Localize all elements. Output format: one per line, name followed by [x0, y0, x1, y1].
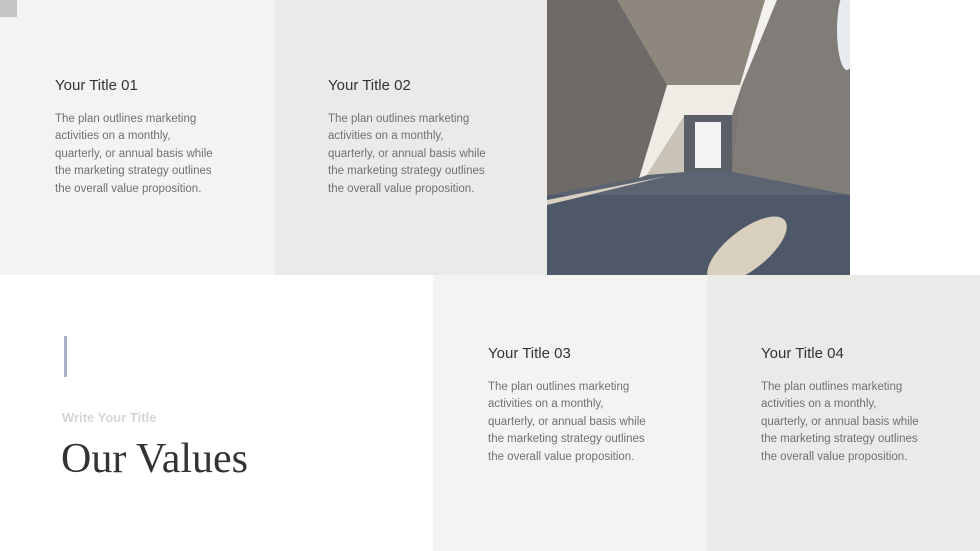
text 01: the marketing strategy outlines — [55, 165, 212, 177]
text 03 — [488, 381, 646, 463]
text 02: quarterly, or annual basis while — [328, 148, 486, 160]
text 03: activities on a monthly, — [488, 398, 603, 410]
text 04: The plan outlines marketing — [761, 381, 902, 393]
text 03: quarterly, or annual basis while — [488, 416, 646, 428]
text 01: quarterly, or annual basis while — [55, 148, 213, 160]
text 04: the marketing strategy outlines — [761, 433, 918, 445]
text 02: the overall value proposition. — [328, 183, 474, 195]
heading 01: Your Title 01 — [55, 77, 138, 94]
panel: title 03 — [433, 275, 707, 551]
text 03: the marketing strategy outlines — [488, 433, 645, 445]
text 03: the overall value proposition. — [488, 451, 634, 463]
text 04: quarterly, or annual basis while — [761, 416, 919, 428]
panel: title 02 — [274, 0, 547, 275]
heading 04: Your Title 04 — [761, 345, 844, 362]
text 01: the overall value proposition. — [55, 183, 201, 195]
subtitle: Write Your Title — [62, 410, 156, 425]
text 04: activities on a monthly, — [761, 398, 876, 410]
text 03: The plan outlines marketing — [488, 381, 629, 393]
text 02: the marketing strategy outlines — [328, 165, 485, 177]
corner square — [0, 0, 17, 17]
photo: concrete corridor — [547, 0, 850, 275]
heading 03: Your Title 03 — [488, 345, 571, 362]
panel: title 01 — [0, 0, 274, 275]
text 01 — [55, 113, 213, 195]
text 02: activities on a monthly, — [328, 130, 443, 142]
text 02: The plan outlines marketing — [328, 113, 469, 125]
text 01: activities on a monthly, — [55, 130, 170, 142]
text 02 — [328, 113, 486, 195]
text 04 — [761, 381, 919, 463]
main title: Our Values — [61, 436, 248, 482]
heading 02: Your Title 02 — [328, 77, 411, 94]
vertical accent line — [64, 336, 67, 377]
text 01: The plan outlines marketing — [55, 113, 196, 125]
text 04: the overall value proposition. — [761, 451, 907, 463]
panel: title 04 — [707, 275, 980, 551]
